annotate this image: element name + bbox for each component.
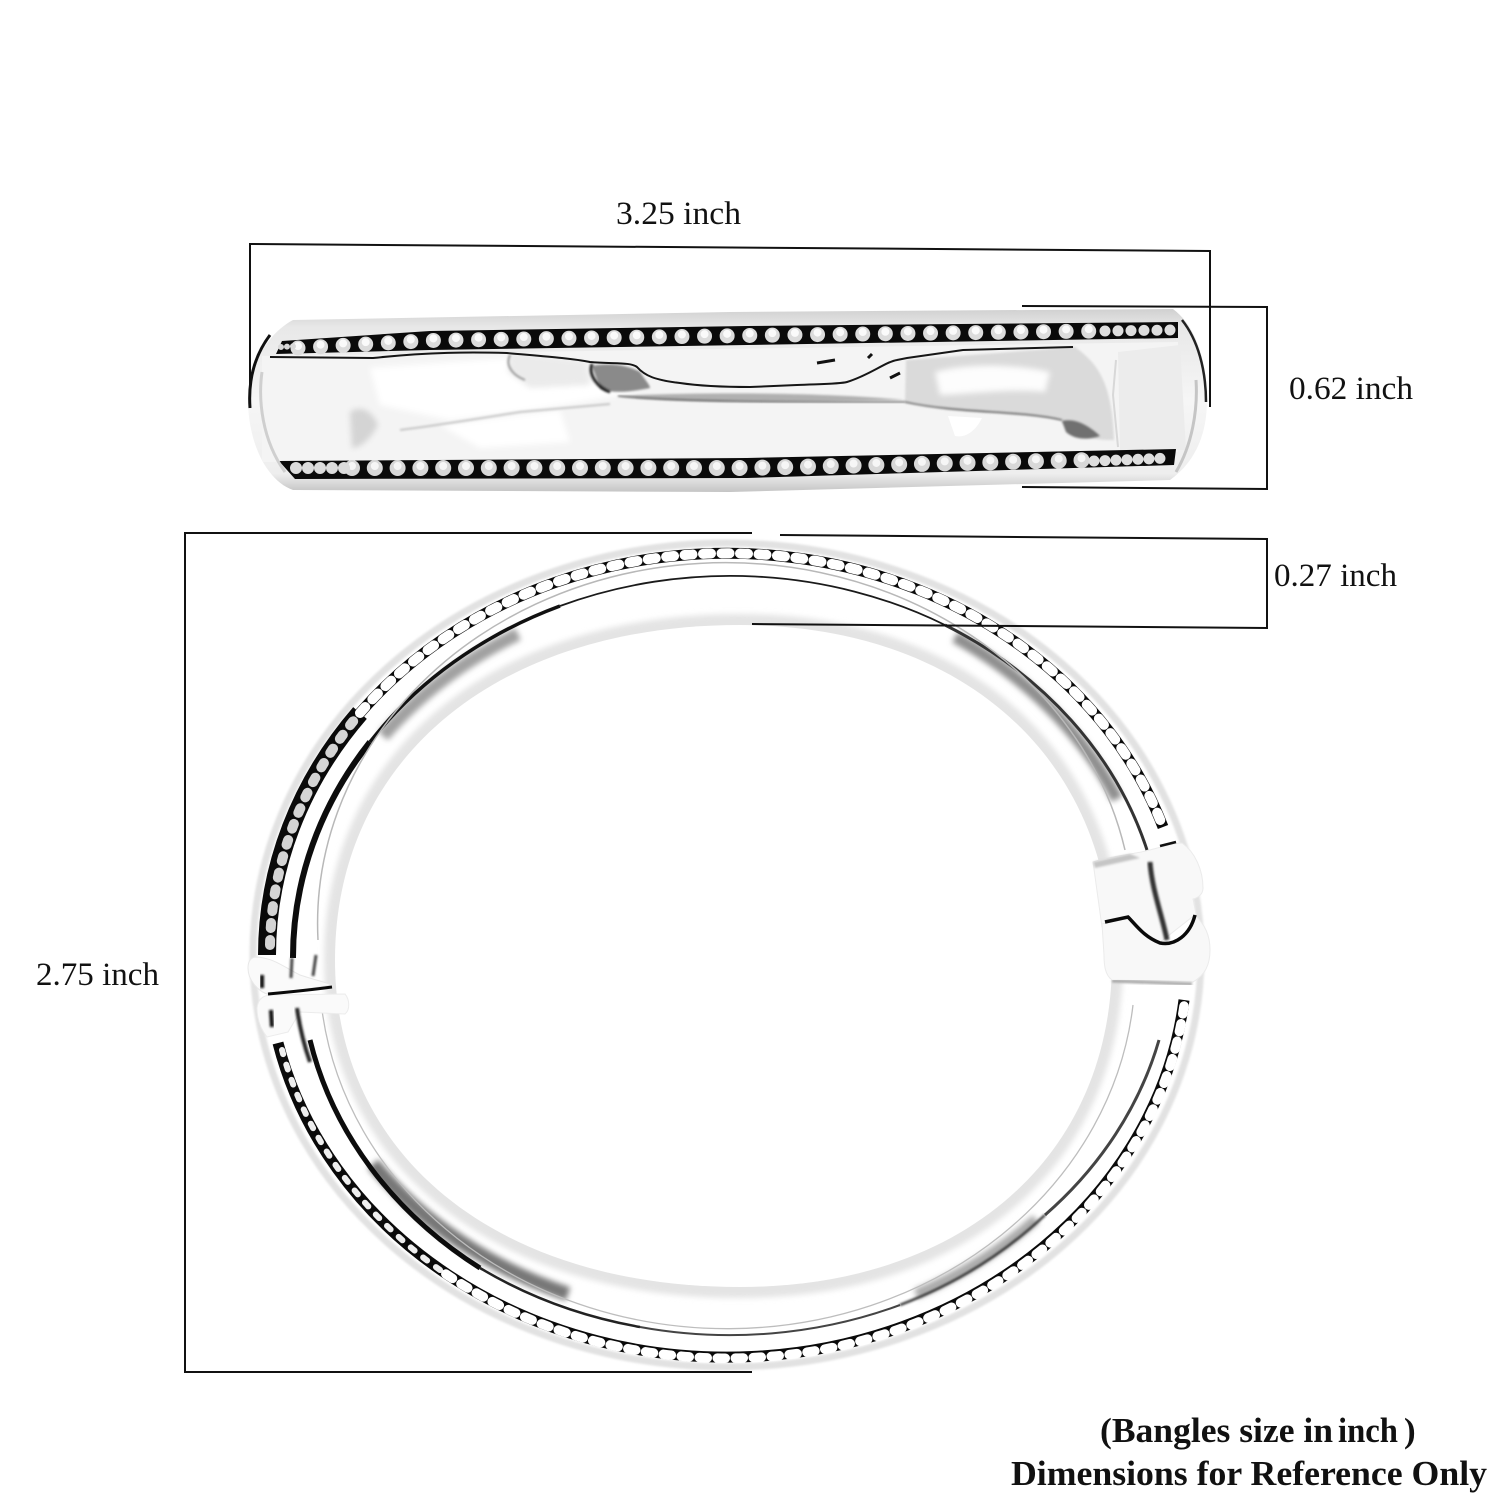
- reference note: [1011, 1411, 1488, 1493]
- reference note: ): [1404, 1411, 1416, 1450]
- dimension: 0.27 inch thickness: 0.27 inch: [1274, 558, 1397, 594]
- lower bead track: [278, 1000, 1184, 1357]
- clasp shading: [1093, 854, 1140, 868]
- reference note: (Bangles size in: [1100, 1411, 1333, 1450]
- dimension: 0.62 inch height: 0.62 inch: [1289, 371, 1413, 407]
- left hinge: [248, 955, 349, 1062]
- soft inner-band shading: [335, 625, 1112, 1287]
- bangle opening: [335, 625, 1112, 1287]
- dimension: 0.27 inch thickness: [752, 535, 1397, 628]
- shaded groove patches: [383, 634, 518, 736]
- flowing hammered contour lines: [270, 347, 1073, 387]
- thin inner contour: [318, 563, 1125, 940]
- reference note: Dimensions for Reference Only: [1011, 1454, 1488, 1493]
- hinge gap: [268, 987, 332, 994]
- hinge shadows: [262, 975, 272, 1027]
- reference note: inch: [1338, 1411, 1398, 1450]
- clasp: [1093, 842, 1210, 984]
- clasp upper block: [1093, 843, 1203, 950]
- top-view bangle: [248, 309, 1207, 492]
- end shading: [250, 335, 270, 408]
- top bead band: [276, 322, 1178, 354]
- dimension: 2.75 inch height: 2.75 inch: [36, 957, 159, 993]
- hinge upper knuckle: [248, 957, 332, 995]
- clasp seam: [1105, 915, 1195, 943]
- dimension: 3.25 inch width: 3.25 inch: [616, 196, 741, 232]
- upper bead track: [267, 713, 360, 955]
- clasp lower block: [1102, 915, 1210, 982]
- outer rim: [250, 540, 1204, 1370]
- dimension: 3.25 inch width: [250, 196, 1210, 408]
- front-view oval bangle: [248, 540, 1210, 1370]
- bottom bead band: [279, 449, 1176, 479]
- bangle body: [248, 309, 1207, 492]
- dimension: 2.75 inch height: [36, 533, 752, 1372]
- main groove lines: [293, 742, 370, 958]
- hinge lower knuckle: [257, 994, 349, 1037]
- polished surface shading: [348, 342, 1184, 448]
- dimension: 0.62 inch height: [1022, 306, 1413, 489]
